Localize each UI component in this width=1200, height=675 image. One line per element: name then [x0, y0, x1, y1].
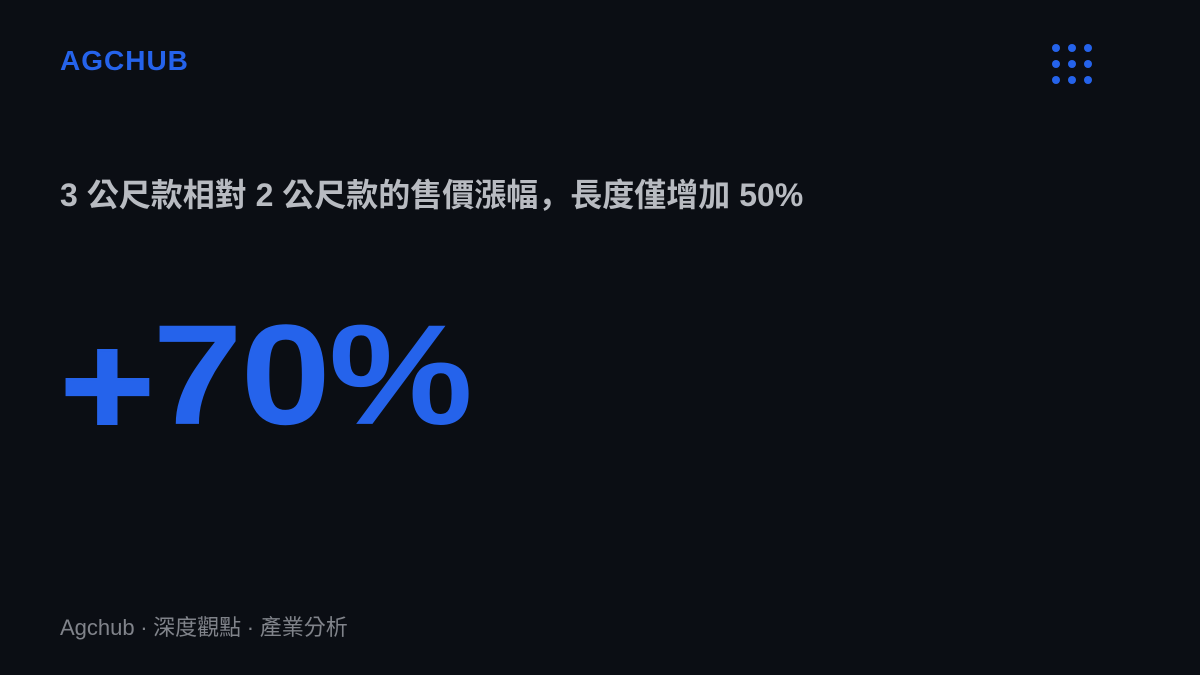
- heading: 3 公尺款相對 2 公尺款的售價漲幅，長度僅增加 50%: [60, 170, 803, 216]
- icon: dot grid: [1052, 44, 1092, 84]
- brand logo text: AGCHUB: [60, 45, 189, 76]
- footer text: Agchub · 深度觀點 · 產業分析: [60, 615, 348, 640]
- big number: +70%: +: [60, 304, 153, 467]
- big number: +70%: 70%: [153, 295, 471, 455]
